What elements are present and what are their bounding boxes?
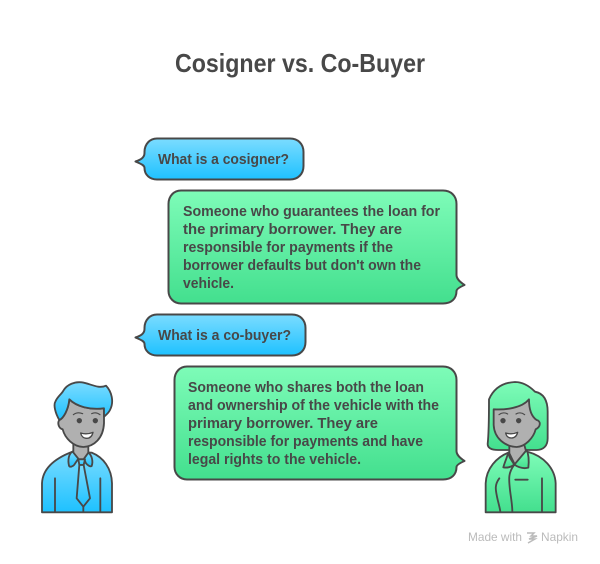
watermark: made with napkin: Napkin: [541, 530, 578, 544]
speech bubble: cosigner answer: the primary borrower. They are: [183, 222, 402, 238]
speech bubble: co-buyer answer: Someone who shares both the loan: [188, 380, 424, 396]
speech bubble: what is a co-buyer: [136, 314, 306, 356]
speech bubble: co-buyer answer: [174, 366, 464, 480]
watermark: made with napkin: Made with: [468, 530, 522, 544]
speech bubble: cosigner answer: vehicle.: [183, 276, 234, 292]
speech bubble: co-buyer answer: responsible for payments and have: [188, 434, 423, 450]
watermark: made with napkin: [468, 530, 578, 544]
speech bubble: what is a cosigner: What is a cosigner?: [158, 152, 289, 168]
speech bubble: cosigner answer: Someone who guarantees the loan for: [183, 204, 440, 220]
speech bubble: what is a cosigner: [136, 138, 304, 180]
speech bubble: co-buyer answer: and ownership of the vehicle with the: [188, 398, 439, 414]
speech bubble: what is a co-buyer: What is a co-buyer?: [158, 328, 291, 344]
speech bubble: cosigner answer: [168, 190, 464, 304]
title: Cosigner vs. Co-Buyer: [175, 48, 425, 78]
speech bubble: co-buyer answer: primary borrower. They are: [188, 416, 378, 432]
icon: man avatar: [42, 382, 112, 512]
speech bubble: co-buyer answer: legal rights to the vehicle.: [188, 452, 361, 468]
icon: woman avatar: [486, 382, 556, 512]
speech bubble: cosigner answer: borrower defaults but don't own the: [183, 258, 421, 274]
speech bubble: cosigner answer: responsible for payments if the: [183, 240, 393, 256]
